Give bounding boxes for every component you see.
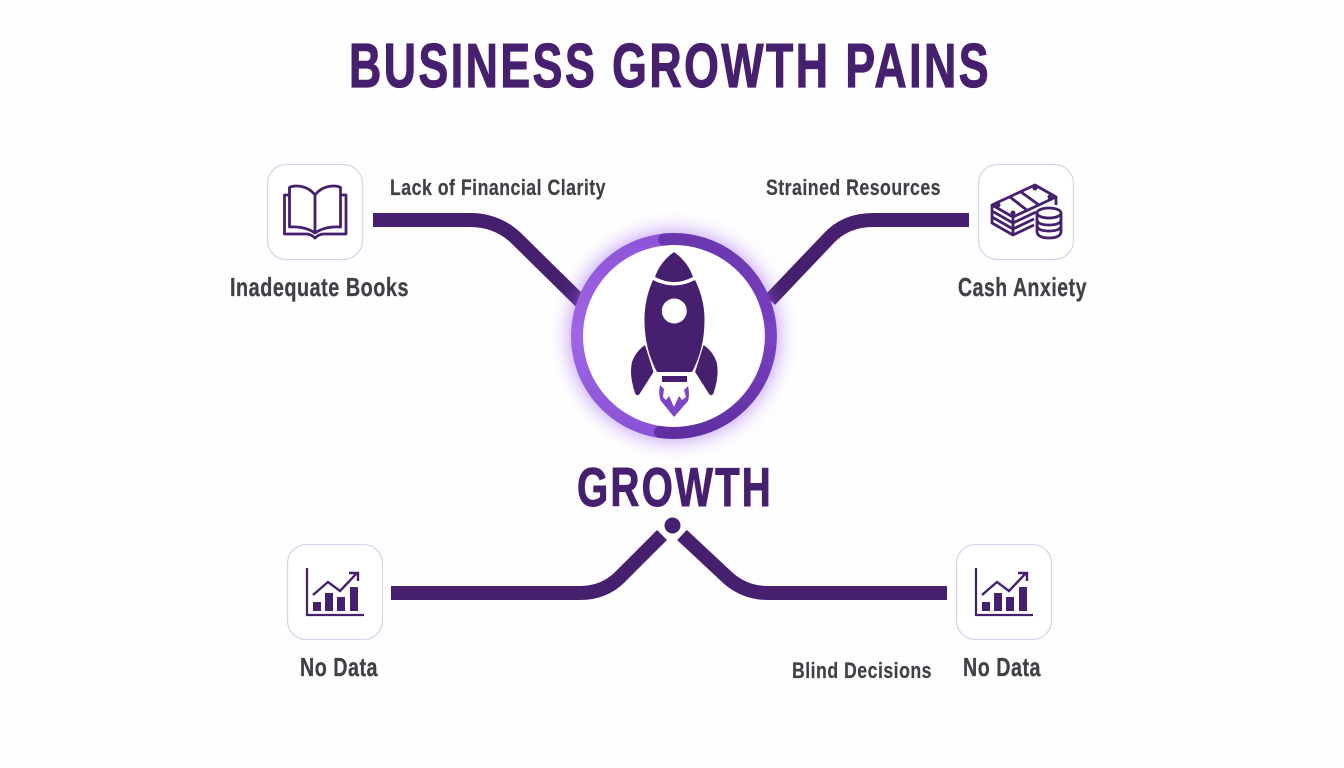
icon: open book (284, 186, 346, 238)
icon: bar chart with arrow (976, 568, 1033, 615)
label: blind decisions: Blind Decisions (792, 658, 932, 683)
card: cash anxiety icon (978, 164, 1074, 260)
connector: bottom left (391, 535, 662, 593)
card: no data icon right (956, 544, 1052, 640)
card: no data icon left (288, 544, 382, 640)
title: BUSINESS GROWTH PAINS (349, 32, 991, 101)
label: strained resources: Strained Resources (766, 175, 941, 200)
central rocket badge (570, 232, 778, 440)
icon: bar chart with arrow (307, 568, 364, 615)
icon: rocket (631, 252, 718, 417)
label: inadequate books: Inadequate Books (230, 272, 409, 302)
label: lack of financial clarity: Lack of Financial Clarity (390, 175, 606, 200)
card: inadequate books icon (268, 164, 362, 260)
label: no data right: No Data (963, 652, 1041, 682)
label: cash anxiety: Cash Anxiety (958, 272, 1087, 302)
connector: top right (770, 220, 969, 300)
connector: top left (373, 220, 580, 301)
connector node dot (664, 518, 680, 534)
connector: bottom right (682, 535, 947, 593)
label: growth: GROWTH (577, 456, 773, 518)
icon: cash stack and coins (992, 185, 1061, 238)
label: no data left: No Data (300, 652, 378, 682)
